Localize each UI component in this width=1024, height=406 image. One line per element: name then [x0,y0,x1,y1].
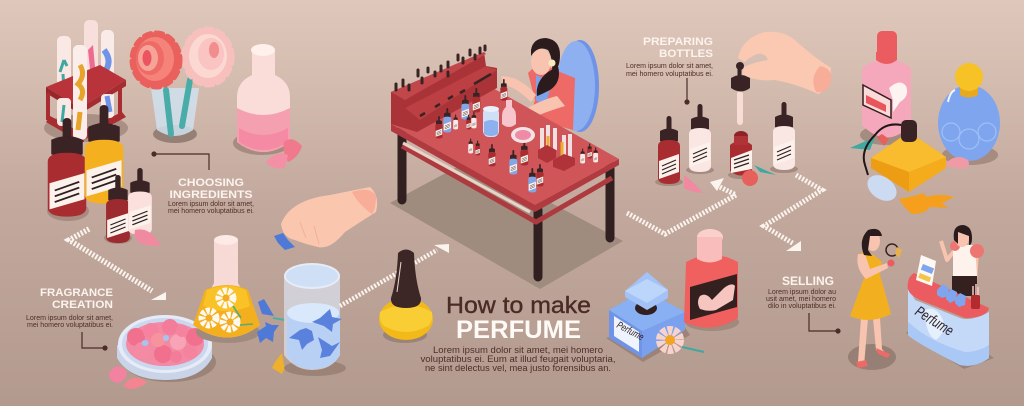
counter emblem [925,309,944,340]
leader dot [151,151,157,157]
counter shadow [906,325,994,369]
counter top [908,273,989,318]
text block: selling: SELLING [782,274,834,288]
hand holding dropper [731,32,831,125]
icon: blue flowers [257,299,285,343]
mini test tube racks [538,125,575,171]
text block: choosing ingredients: mei homero voluptatibus ei. [168,208,254,215]
text block: choosing ingredients: Lorem ipsum dolor sit amet, [168,201,254,208]
text block: preparing bottles [626,36,713,78]
text block: choosing ingredients: CHOOSING [178,177,244,189]
mini beaker, flask and bowl [483,100,535,143]
red perfume bottle [684,229,739,331]
text block: selling: usit amet, mei homero [766,296,836,303]
blue perfume box [606,272,690,362]
description: Lorem ipsum dolor sit amet, mei homero [433,345,603,355]
icon: small pale dropper bottle [128,168,152,235]
yellow atomizer bottle [850,120,954,214]
icon: red dropper bottle [47,118,89,221]
pink flask with petals [233,44,302,168]
yellow perfume bottle with black cap [379,250,433,343]
table top [391,78,619,205]
table legs and braces [402,130,612,277]
leader: fragrance creation [82,332,105,348]
test tube rack [44,20,128,142]
leader dot [835,328,841,334]
text block: selling: Lorem ipsum dolor au [768,289,836,296]
title: How to make [446,292,591,318]
arrow: preparing bottles to selling [764,175,822,251]
arrow: ingredients to fragrance [69,229,166,300]
counter lower band [908,322,989,366]
counter body [908,287,989,366]
text block: preparing bottles: PREPARING [643,36,713,48]
customer in yellow dress [848,229,902,370]
blue perfume box: Perfume [615,320,646,343]
leader dot [684,99,690,105]
text block: preparing bottles: BOTTLES [659,48,713,60]
sales counter with seller [906,225,994,369]
icon: daisy [661,331,704,352]
icon: small red dropper bottle [104,175,132,244]
workbench table with perfumer [391,38,619,277]
leader: choosing ingredients [154,154,209,170]
seller [941,225,984,296]
tiered bottle rack [391,46,497,132]
perfume bottles group [850,31,1000,214]
arrow: bench to preparing bottles [627,178,736,234]
text block: selling: dilo in voluptatibus ei. [768,303,836,310]
beaker with water [284,263,346,376]
arrow: fragrance to workbench [340,244,449,306]
text block: preparing bottles: Lorem ipsum dolor sit amet, [626,63,713,70]
bottles being prepared [655,32,831,193]
icon: pale dropper bottle [770,102,798,173]
perfumer [501,38,575,130]
workbench shadow [390,160,623,289]
blue perfume bottle [938,63,1000,165]
icon: petals [944,157,969,169]
glass with roses [132,29,232,143]
text block: preparing bottles: mei homero voluptatibus ei. [626,71,713,78]
text block: choosing ingredients [168,177,254,215]
icon: yellow dropper bottle [85,105,123,204]
icon: pale dropper bottle [686,104,714,174]
text block: fragrance creation: mei homero voluptatibus ei. [27,322,113,329]
description: ne sint delectus vel, mea justo forensibus an. [425,363,611,373]
text block: fragrance creation: CREATION [52,299,113,311]
small bottles on table [435,79,598,192]
subtitle: PERFUME [456,316,581,344]
leader: preparing bottles [686,78,688,102]
pink spray bottle [860,31,912,145]
leader: selling [809,313,838,331]
icon: petal [135,229,161,246]
icon: red dropper bottle [655,116,683,186]
icon: petal [684,175,703,193]
text block: choosing ingredients: INGREDIENTS [170,189,252,201]
text block: fragrance creation: FRAGRANCE [40,287,113,299]
panel: choosing ingredients illustration [44,20,302,246]
bowl of petals [109,315,216,389]
text block: selling [766,274,836,310]
chair [557,40,599,132]
text block: fragrance creation [26,287,113,329]
hand dropping a flower [274,187,377,250]
leader dot [102,345,108,351]
text block: fragrance creation: Lorem ipsum dolor sit amet, [26,315,113,322]
counter brand text: Perfume [912,303,957,340]
table edge [391,124,619,212]
leaflet stand [916,255,936,286]
icon: yellow flowers [272,353,296,374]
flask with daisies [193,235,260,343]
icon: open red bottle [728,131,754,179]
icon: rose and leaves [742,165,776,186]
product boxes and cup [937,284,980,309]
description [420,345,616,373]
description: voluptatibus ei. Eum at illud feugait voluptaria, [420,354,616,364]
